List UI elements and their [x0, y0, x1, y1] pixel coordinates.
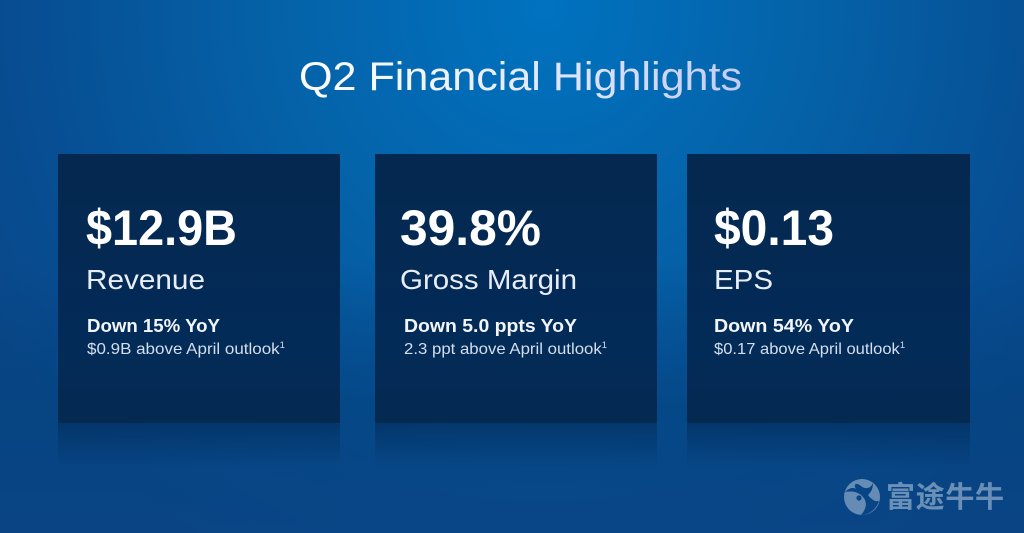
title: Q2 Financial Highlights: [299, 55, 742, 99]
panel: gross margin: [375, 154, 657, 468]
panel: eps: [687, 154, 970, 468]
revenue value: $12.9B: [86, 200, 237, 256]
revenue label: Revenue: [86, 264, 205, 295]
gross margin outlook: 2.3 ppt above April outlook: [404, 341, 593, 358]
eps outlook: 1: [900, 340, 905, 350]
gross margin change: Down 5.0 ppts YoY: [404, 316, 577, 336]
gross margin value: 39.8%: [400, 200, 541, 256]
eps value: $0.13: [714, 200, 834, 256]
eps change: Down 54% YoY: [714, 316, 854, 336]
gross margin label: Gross Margin: [400, 264, 577, 295]
revenue outlook: $0.9B above April outlook: [87, 341, 268, 358]
eps outlook: $0.17 above April outlook: [714, 341, 894, 358]
revenue outlook: 1: [280, 340, 285, 350]
watermark text: 富途牛牛: [886, 474, 1004, 516]
panel: revenue: [58, 154, 340, 468]
gross margin outlook: 1: [602, 340, 607, 350]
eps label: EPS: [714, 264, 773, 295]
watermark: [844, 474, 1004, 516]
revenue change: Down 15% YoY: [87, 316, 220, 336]
icon: watermark logo: [844, 479, 880, 515]
